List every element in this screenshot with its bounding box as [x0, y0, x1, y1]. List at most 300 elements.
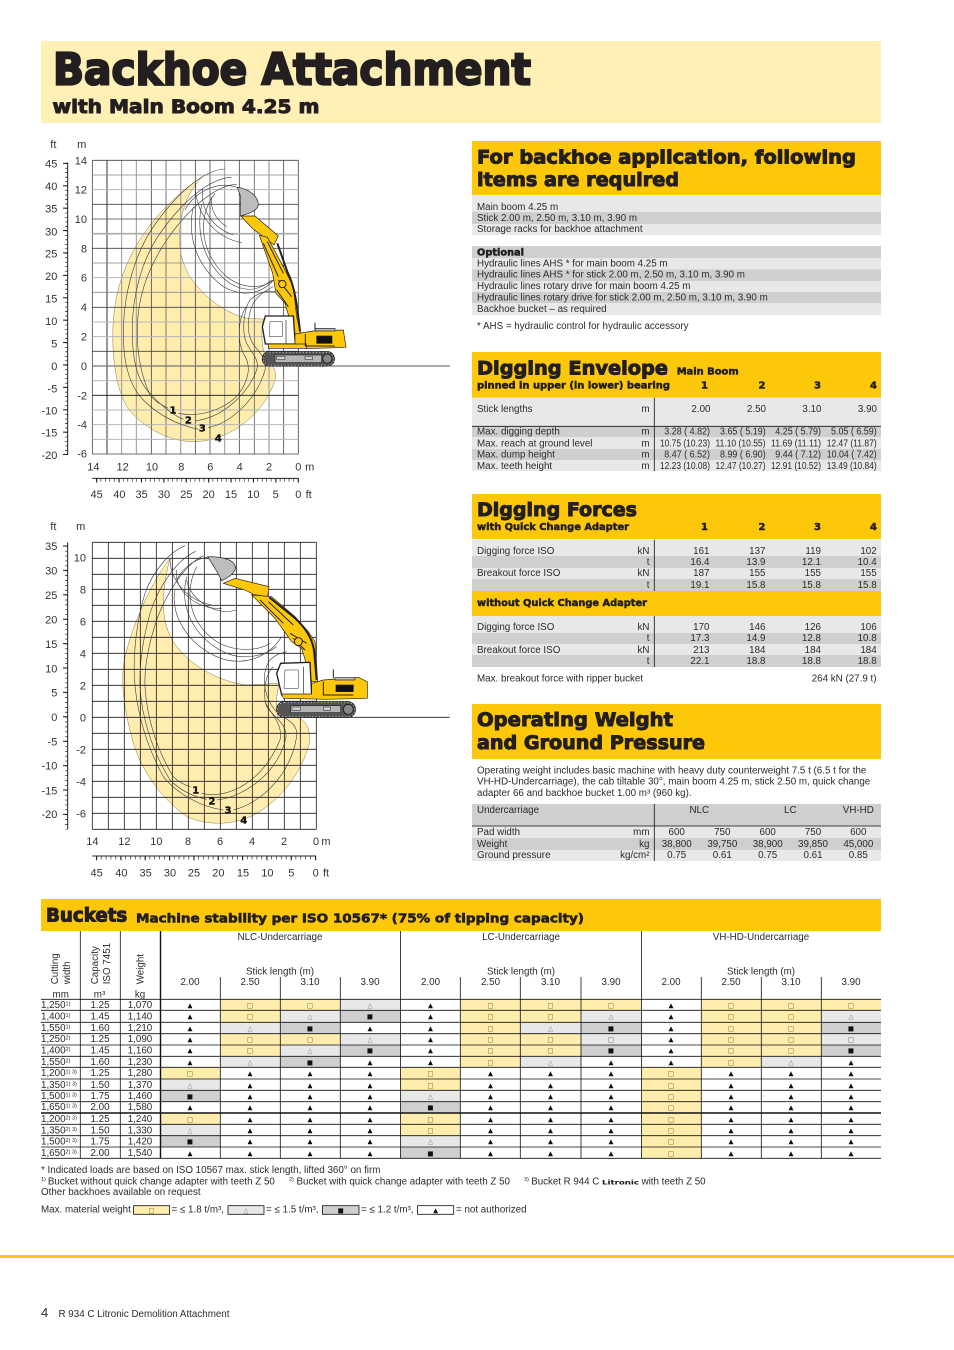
envelope table: 12.91 (10.52): [771, 461, 821, 472]
bottom metre scale: 14: [86, 836, 98, 848]
forces table with adapter: t: [647, 580, 650, 591]
heading band: 4: [870, 380, 877, 391]
required list: [472, 195, 881, 235]
material weight symbols: △: [308, 1047, 312, 1055]
forces table without adapter: Breakout force ISO: [477, 645, 561, 656]
forces table with adapter: kN: [638, 568, 650, 579]
panel: digging envelope: [472, 352, 881, 472]
legend key: 1.5 t/m3: [228, 1204, 318, 1215]
undercarriage headers: 3.90: [841, 977, 861, 988]
footnotes: Other backhoes available on request: [41, 1187, 201, 1198]
envelope table: 8.99 ( 6.90): [720, 449, 766, 460]
legend key: not authorized: = not authorized: [456, 1204, 527, 1215]
forces table without adapter: t: [647, 633, 650, 644]
metre axis: 10: [74, 552, 86, 564]
undercarriage headers: 3.10: [300, 977, 320, 988]
weight table: Pad width: [477, 827, 520, 838]
heading band: 2: [759, 380, 766, 391]
envelope table: Stick lengths: [477, 404, 533, 415]
weight table: Weight: [477, 839, 508, 850]
bucket data columns: 1,070: [128, 1000, 153, 1011]
bottom metre scale: 2: [266, 461, 272, 473]
bottom feet scale: 5: [273, 489, 279, 501]
material weight symbols: ▲▲▲▲▲▲▲▲▲: [248, 1081, 854, 1089]
heading band: [472, 704, 881, 759]
feet axis: 25: [45, 248, 57, 260]
forces table without adapter: 213: [693, 645, 710, 656]
undercarriage headers: 2.50: [481, 977, 501, 988]
undercarriage headers: Stick length (m): [487, 966, 555, 977]
material weight symbols: ▲▲▲: [188, 1013, 674, 1021]
bottom metre scale: m: [321, 836, 331, 848]
chart: digging envelope upper bearing: [41, 139, 450, 501]
bucket data columns: 1): [66, 1002, 71, 1008]
legend: material weight: Max. material weight: [41, 1204, 131, 1215]
bottom metre scale: 0: [295, 461, 301, 473]
bucket data columns: 1,650: [41, 1102, 66, 1113]
curve numbers: [170, 406, 222, 444]
forces table with adapter: 10.4: [858, 557, 877, 568]
forces table without adapter: 146: [749, 622, 766, 633]
optional list: Hydraulic lines rotary drive for stick 2.00 m, 2.50 m, 3.10 m, 3.90 m: [477, 292, 768, 303]
forces table with adapter: 13.9: [746, 557, 766, 568]
bottom metre scale: 12: [118, 836, 130, 848]
forces table with adapter: 155: [805, 568, 822, 579]
bucket column headers: Weight: [136, 954, 146, 984]
legend key: 1.8 t/m3: = ≤ 1.8 t/m³,: [172, 1204, 224, 1215]
bucket column headers: Cutting: [50, 953, 61, 984]
legend key: not authorized: [418, 1204, 527, 1215]
ripper bucket note: 264 kN (27.9 t): [812, 673, 876, 684]
material weight symbols: ■: [427, 1149, 434, 1157]
heading band: Machine stability per ISO 10567* (75% of tipping capacity): [136, 910, 584, 925]
required list: Stick 2.00 m, 2.50 m, 3.10 m, 3.90 m: [477, 213, 637, 224]
metre axis: 14: [75, 155, 87, 167]
material weight symbols: △△△: [308, 1013, 854, 1021]
forces table with adapter: 12.1: [802, 557, 821, 568]
excavator icon: [237, 187, 346, 366]
envelope table: 3.90: [858, 404, 878, 415]
footnotes: Bucket without quick change adapter with teeth Z 50: [48, 1176, 275, 1187]
heading band: Digging Envelope: [477, 358, 668, 380]
optional list: Hydraulic lines AHS * for main boom 4.25 m: [477, 258, 668, 269]
feet axis: ft: [50, 521, 56, 533]
bucket data columns: 1,400: [41, 1011, 66, 1022]
material weight symbols: □□: [487, 1058, 734, 1066]
forces table without adapter: t: [647, 656, 650, 667]
weight table: 38,800: [662, 839, 692, 850]
bucket data columns: 1) 3): [66, 1092, 77, 1098]
weight table: Undercarriage: [477, 805, 540, 816]
ripper bucket note: [477, 673, 876, 684]
bucket data columns: 1,280: [128, 1068, 153, 1079]
metre axis: -4: [76, 776, 86, 788]
metre axis: -6: [76, 808, 86, 820]
heading band: 4: [870, 522, 877, 533]
forces table with adapter: 119: [805, 546, 821, 557]
forces table without adapter: 14.9: [746, 633, 766, 644]
envelope table: 3.10: [802, 404, 822, 415]
envelope table: m: [641, 438, 650, 449]
envelope table: 8.47 ( 6.52): [664, 449, 710, 460]
footnotes: [41, 1165, 706, 1198]
envelope table: Max. teeth height: [477, 461, 552, 472]
optional list: [472, 246, 881, 315]
bucket data columns: 2.00: [90, 1102, 110, 1113]
sub-heading without adapter: [472, 591, 881, 616]
sub-heading without adapter: without Quick Change Adapter: [477, 598, 647, 609]
heading band: Operating Weight: [477, 709, 673, 731]
required list: Main boom 4.25 m: [477, 202, 558, 213]
footer: R 934 C Litronic Demolition Attachment: [58, 1309, 230, 1320]
forces table with adapter: Breakout force ISO: [477, 568, 561, 579]
undercarriage headers: VH-HD-Undercarriage: [713, 932, 810, 943]
heading band: [472, 141, 881, 195]
weight table: LC: [784, 805, 797, 816]
optional list: Backhoe bucket – as required: [477, 304, 607, 315]
bucket data columns: 1,210: [128, 1023, 153, 1034]
material weight symbols: △: [368, 1001, 372, 1009]
bucket data columns: 2): [66, 1047, 71, 1053]
weight table: VH-HD: [843, 805, 874, 816]
envelope table: 3.28 ( 4.82): [664, 426, 710, 438]
metre axis: 4: [81, 302, 87, 314]
bucket data columns: 1,330: [128, 1125, 153, 1136]
weight table: 0.61: [803, 850, 823, 861]
material weight symbols: ▲▲▲▲▲▲▲▲▲▲: [188, 1104, 854, 1112]
legend: material weight: [41, 1204, 527, 1215]
bucket data columns: 1.50: [90, 1125, 110, 1136]
bucket data columns: 1,420: [128, 1136, 153, 1147]
footnotes: 3): [524, 1177, 529, 1183]
envelope table: m: [641, 404, 650, 415]
feet axis: 15: [45, 639, 57, 651]
bottom feet scale: 15: [237, 867, 249, 879]
feet axis: 20: [45, 614, 57, 626]
forces table without adapter: 17.3: [690, 633, 710, 644]
material weight symbols: ▲▲▲▲▲▲: [188, 1058, 854, 1066]
bucket data columns: 2) 3): [66, 1138, 77, 1144]
feet axis: 10: [45, 663, 57, 675]
undercarriage headers: 3.10: [541, 977, 561, 988]
grid: [92, 160, 450, 454]
envelope table: 12.47 (10.27): [716, 461, 766, 472]
material weight symbols: ▲▲▲▲▲▲▲▲▲: [248, 1138, 854, 1146]
heading band: Digging Forces: [477, 499, 637, 521]
weight table: 45,000: [843, 839, 874, 850]
material weight symbols: △: [428, 1138, 433, 1146]
panel: digging forces: [472, 494, 881, 684]
footnotes: Bucket with quick change adapter with teeth Z 50: [296, 1176, 511, 1187]
feet axis: 35: [45, 204, 57, 216]
curve numbers: 3: [199, 423, 206, 434]
metre axis: m: [77, 139, 86, 151]
envelope table: 2.50: [747, 404, 767, 415]
bucket data columns: [41, 1000, 153, 1159]
bottom metre scale: [87, 461, 314, 473]
panel: operating weight: [472, 704, 881, 861]
material weight symbols: □: [668, 1104, 674, 1112]
material weight symbols: △: [188, 1127, 192, 1135]
forces table with adapter: 187: [693, 568, 710, 579]
material weight symbols: ▲▲▲▲▲▲▲▲▲: [248, 1127, 854, 1135]
forces table without adapter: 184: [805, 645, 822, 656]
bucket data columns: 1) 3): [66, 1070, 77, 1076]
undercarriage headers: LC-Undercarriage: [482, 932, 560, 943]
feet axis: -20: [41, 450, 57, 462]
weight table: NLC: [689, 805, 709, 816]
weight table: 750: [714, 827, 731, 838]
weight table: kg: [639, 839, 650, 850]
bottom feet scale: 0: [313, 867, 319, 879]
feet axis: 0: [51, 361, 57, 373]
bucket column headers: mm: [53, 989, 69, 1000]
bottom metre scale: 8: [178, 461, 184, 473]
envelope table: 3.65 ( 5.19): [720, 426, 766, 438]
subtitle: with Main Boom 4.25 m: [52, 96, 320, 118]
feet axis: -5: [48, 736, 57, 748]
bucket data columns: 1,160: [128, 1045, 153, 1056]
feet axis: 20: [45, 271, 57, 283]
bucket data columns: 1,250: [41, 1000, 66, 1011]
envelope table: Max. dump height: [477, 449, 555, 460]
forces table with adapter: 15.8: [802, 580, 822, 591]
metre axis: [75, 139, 87, 460]
curve numbers: 1: [170, 406, 177, 417]
undercarriage headers: 3.90: [601, 977, 621, 988]
feet axis: 40: [45, 181, 57, 193]
envelope table: 13.49 (10.84): [827, 461, 877, 472]
weight table: 600: [760, 827, 776, 838]
material weight symbols: △△△: [248, 1058, 794, 1066]
material weight symbols: ▲▲▲▲: [188, 1024, 674, 1032]
bucket data columns: 1) 3): [66, 1082, 77, 1088]
envelope table: Max. digging depth: [477, 426, 560, 438]
title banner: [41, 41, 881, 123]
description: VH-HD-Undercarriage), the cab tiltable 30°, main boom 4.25 m, stick 2.50 m, quick change: [477, 776, 871, 788]
forces table without adapter: [472, 616, 881, 667]
reach curves: [123, 169, 275, 429]
feet axis: 45: [45, 158, 57, 170]
bottom feet scale: 10: [247, 489, 259, 501]
bucket column headers: m³: [94, 989, 106, 1000]
bottom feet scale: 5: [288, 867, 294, 879]
bucket data columns: 2): [66, 1058, 71, 1064]
envelope table: 12.23 (10.08): [660, 461, 710, 472]
bottom feet scale: 45: [91, 489, 103, 501]
curve numbers: 3: [225, 806, 232, 817]
material weight symbols: □□□: [187, 1069, 674, 1077]
material weight symbols: ■■■: [307, 1024, 854, 1032]
bottom feet scale: [91, 478, 312, 501]
feet axis: [41, 139, 68, 462]
bucket data columns: 1.45: [90, 1011, 110, 1022]
bucket data columns: 1,580: [128, 1102, 153, 1113]
metre axis: m: [76, 521, 85, 533]
bottom feet scale: 40: [115, 867, 127, 879]
envelope table: m: [641, 449, 650, 460]
material weight symbols: ■: [307, 1058, 313, 1066]
bucket data columns: 1,090: [128, 1034, 153, 1045]
footer: 4: [41, 1305, 48, 1320]
bucket data columns: 1.25: [90, 1068, 110, 1079]
heading band: Main Boom: [677, 366, 739, 377]
heading band: [472, 494, 881, 539]
curve numbers: 2: [209, 796, 216, 807]
yellow working range area: [113, 176, 276, 442]
material weight symbols: □□: [427, 1127, 674, 1135]
material weight symbols: ▲▲▲: [188, 1001, 674, 1009]
legend key: 1.5 t/m3: △: [244, 1206, 248, 1214]
bottom feet scale: 10: [261, 867, 273, 879]
bottom metre scale: 4: [249, 836, 255, 848]
metre axis: 6: [80, 616, 86, 628]
heading band: Buckets: [46, 906, 127, 927]
bucket data columns: 1): [66, 1024, 71, 1030]
feet axis: -5: [48, 383, 57, 395]
heading band: 3: [814, 380, 821, 391]
bottom feet scale: 20: [203, 489, 215, 501]
feet axis: -15: [41, 785, 57, 797]
forces table with adapter: 137: [749, 546, 766, 557]
bucket data columns: 2): [66, 1036, 71, 1042]
undercarriage headers: 2.50: [721, 977, 741, 988]
material weight symbols: △: [188, 1081, 192, 1089]
grid: [92, 542, 450, 829]
description: [477, 765, 871, 799]
forces table without adapter: 10.8: [858, 633, 877, 644]
heading band: 2: [759, 522, 766, 533]
weight table: [472, 804, 881, 861]
envelope table: m: [641, 426, 650, 438]
feet axis: ft: [50, 139, 56, 151]
bottom metre scale: [86, 836, 331, 848]
feet axis: -15: [41, 428, 57, 440]
bottom feet scale: 35: [136, 489, 148, 501]
forces table with adapter: t: [647, 557, 650, 568]
heading band: 1: [701, 522, 708, 533]
heading band: 3: [814, 522, 821, 533]
envelope table: 5.05 ( 6.59): [831, 426, 877, 438]
bucket data columns: 1,250: [41, 1034, 66, 1045]
undercarriage headers: 3.10: [781, 977, 801, 988]
feet axis: 30: [45, 565, 57, 577]
undercarriage headers: Stick length (m): [727, 966, 795, 977]
weight table: 39,750: [707, 839, 738, 850]
bucket data columns: 1,200: [41, 1114, 66, 1125]
feet axis: 0: [51, 712, 57, 724]
bottom metre scale: 10: [150, 836, 162, 848]
bucket data columns: 1,500: [41, 1091, 66, 1102]
forces table without adapter: 18.8: [746, 656, 766, 667]
envelope table: 9.44 ( 7.12): [775, 449, 821, 460]
forces table without adapter: 12.8: [802, 633, 822, 644]
bucket data columns: 2) 3): [66, 1150, 77, 1156]
forces table with adapter: 155: [749, 568, 766, 579]
bucket data columns: 1,400: [41, 1045, 66, 1056]
footnotes: 1): [41, 1177, 46, 1183]
bucket data columns: 1): [66, 1013, 71, 1019]
excavator icon: [208, 557, 367, 717]
panel: required items: [472, 141, 881, 332]
weight table: 39,850: [798, 839, 829, 850]
bottom feet scale: 40: [113, 489, 125, 501]
bottom metre scale: 12: [117, 461, 129, 473]
bottom feet scale: 15: [225, 489, 237, 501]
forces table with adapter: 15.8: [746, 580, 766, 591]
forces table with adapter: 15.8: [858, 580, 877, 591]
bucket data columns: 1,550: [41, 1023, 66, 1034]
feet axis: -20: [41, 809, 57, 821]
legend key: 1.2 t/m3: ■: [338, 1206, 344, 1214]
metre axis: 0: [81, 361, 87, 373]
metre axis: -4: [77, 420, 87, 432]
bucket data columns: 2) 3): [66, 1127, 77, 1133]
metre axis: 10: [75, 214, 87, 226]
feet axis: 30: [45, 226, 57, 238]
optional list: Hydraulic lines AHS * for stick 2.00 m, 2.50 m, 3.10 m, 3.90 m: [477, 270, 745, 281]
bucket data columns: 1,650: [41, 1148, 66, 1159]
footnotes: Bucket R 944 C: [531, 1176, 599, 1187]
weight table: 600: [850, 827, 867, 838]
bottom feet scale: 25: [188, 867, 200, 879]
bucket column headers: [50, 943, 146, 1000]
bucket data columns: 1.75: [90, 1091, 110, 1102]
curve numbers: [192, 786, 247, 827]
weight table: 38,900: [753, 839, 783, 850]
heading band: items are required: [477, 169, 679, 191]
bottom feet scale: 30: [158, 489, 170, 501]
optional list: Optional: [477, 248, 524, 258]
forces table without adapter: 170: [693, 622, 710, 633]
forces table without adapter: kN: [638, 622, 650, 633]
AHS note: * AHS = hydraulic control for hydraulic accessory: [477, 321, 689, 332]
bottom feet scale: 25: [180, 489, 192, 501]
footer: [41, 1305, 230, 1320]
metre axis: 6: [81, 272, 87, 284]
feet axis: 5: [51, 338, 57, 350]
curve numbers: 4: [240, 816, 247, 827]
metre axis: 8: [80, 584, 86, 596]
feet axis: 5: [51, 687, 57, 699]
bucket data columns: 1.25: [90, 1000, 110, 1011]
legend key: 1.8 t/m3: [134, 1204, 224, 1215]
undercarriage headers: 2.00: [180, 977, 200, 988]
forces table without adapter: 184: [860, 645, 877, 656]
envelope table: 10.75 (10.23): [660, 438, 710, 449]
undercarriage headers: 2.00: [421, 977, 441, 988]
forces table without adapter: 18.8: [802, 656, 822, 667]
metre axis: 2: [80, 680, 86, 692]
heading band: pinned in upper (in lower) bearing: [477, 380, 670, 391]
bottom metre scale: 14: [87, 461, 99, 473]
bottom metre scale: 10: [146, 461, 158, 473]
legend key: 1.2 t/m3: [322, 1204, 413, 1215]
footnotes: Litronic: [602, 1178, 639, 1186]
legend key: 1.2 t/m3: = ≤ 1.2 t/m³,: [361, 1204, 413, 1215]
forces table with adapter: kN: [638, 546, 650, 557]
bucket data columns: 1,350: [41, 1080, 66, 1091]
forces table with adapter: 155: [860, 568, 877, 579]
material weight symbols: ■: [187, 1138, 193, 1146]
heading band: [472, 352, 881, 398]
footnotes: * Indicated loads are based on ISO 10567 max. stick length, lifted 360° on firm: [41, 1165, 380, 1176]
bucket data columns: 1,240: [128, 1114, 153, 1125]
forces table with adapter: [472, 540, 881, 591]
material weight symbols: ▲▲▲▲▲▲▲▲▲: [248, 1092, 854, 1100]
forces table without adapter: 106: [860, 622, 877, 633]
weight table: Ground pressure: [477, 850, 551, 861]
